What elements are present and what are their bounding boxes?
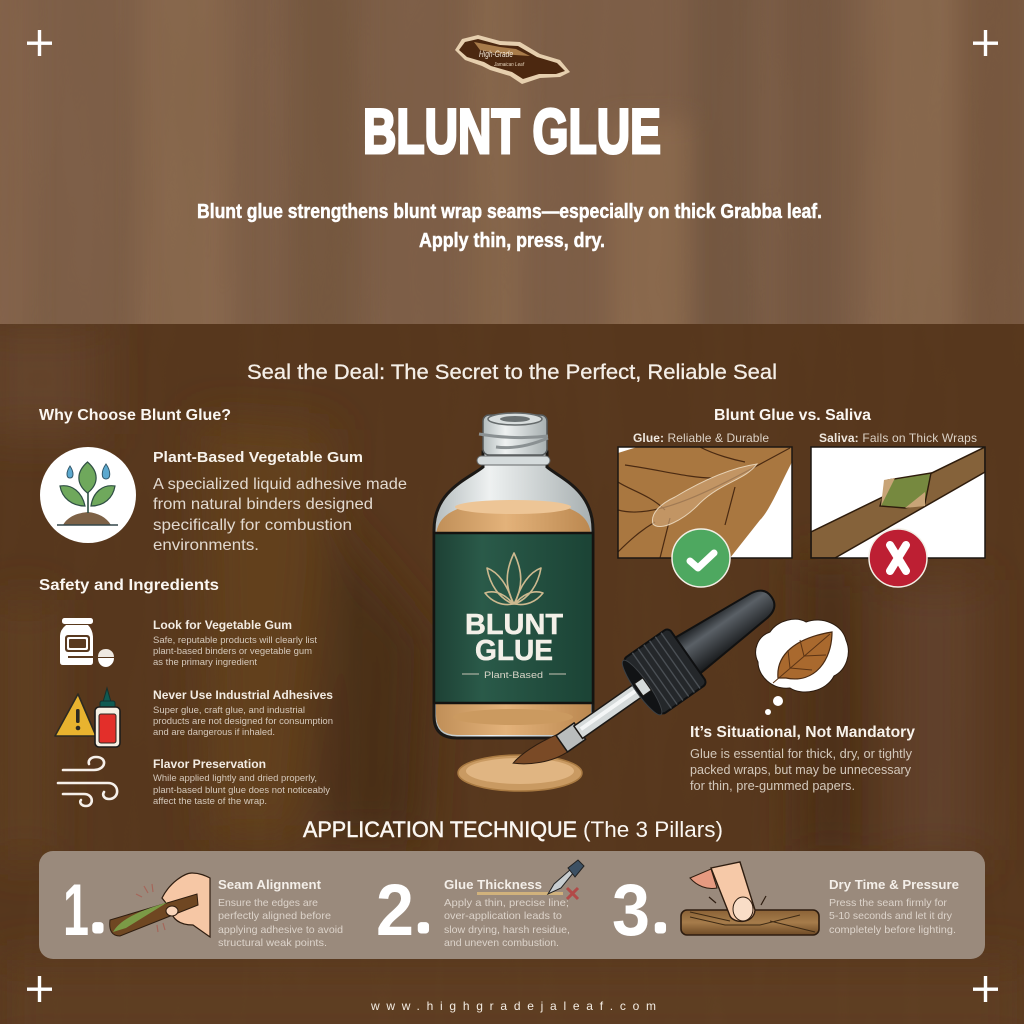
text: industrial adhesives bbox=[153, 705, 333, 738]
text: vegetable gum: Safe, reputable products will clearly list bbox=[153, 635, 317, 646]
step 1: applying adhesive to avoid bbox=[218, 924, 343, 936]
panel: why choose blunt glue: Why Choose Blunt Glue? bbox=[39, 407, 231, 424]
logo: Jamaica leaf map bbox=[455, 35, 570, 84]
liquid bbox=[436, 500, 591, 735]
labels: Saliva: Fails on Thick Wraps bbox=[819, 431, 977, 445]
panel: why choose blunt glue bbox=[39, 407, 407, 554]
subtitle: Blunt glue strengthens blunt wrap seams—especially on thick Grabba leaf. bbox=[197, 201, 822, 223]
description: environments. bbox=[153, 537, 259, 554]
step 2: Apply a thin, precise line; bbox=[444, 897, 569, 909]
text: flavor preservation: plant-based blunt glue does not noticeably bbox=[153, 785, 330, 796]
step 3: 3 bbox=[612, 870, 650, 951]
text: flavor preservation bbox=[153, 773, 330, 807]
logo: Jamaica leaf map: High-Grade bbox=[479, 49, 513, 59]
step 2: Glue Thickness bbox=[444, 878, 542, 892]
text: vegetable gum: plant-based binders or vegetable gum bbox=[153, 646, 312, 657]
subtitle bbox=[197, 201, 822, 252]
panel: safety and ingredients: Look for Vegetable Gum bbox=[153, 618, 292, 632]
icon: wind bbox=[58, 757, 117, 806]
application technique heading bbox=[303, 817, 723, 842]
panel: safety and ingredients: Safety and Ingredients bbox=[39, 577, 219, 594]
labels: Glue: Reliable & Durable bbox=[633, 431, 769, 445]
description: A specialized liquid adhesive made bbox=[153, 476, 407, 493]
icon: jar and scoop bbox=[60, 618, 114, 667]
description: specifically for combustion bbox=[153, 517, 352, 534]
panel: glue vs saliva: Blunt Glue vs. Saliva bbox=[714, 407, 871, 424]
icon: plant in soil bbox=[40, 447, 136, 543]
bottle glass body bbox=[434, 452, 593, 738]
bottle illustration: Plant-Based bbox=[484, 670, 543, 681]
subtitle: Apply thin, press, dry. bbox=[419, 230, 605, 252]
step 1: 1 bbox=[63, 870, 89, 951]
step 1: Ensure the edges are bbox=[218, 897, 318, 909]
text: industrial adhesives: Super glue, craft glue, and industrial bbox=[153, 705, 305, 716]
panel: three pillars bbox=[39, 851, 985, 959]
application technique heading: APPLICATION TECHNIQUE bbox=[303, 817, 577, 842]
panel: safety and ingredients: Never Use Industrial Adhesives bbox=[153, 688, 333, 702]
text: vegetable gum: as the primary ingredient bbox=[153, 657, 257, 668]
step 3: Dry Time & Pressure bbox=[829, 878, 959, 892]
application technique heading: (The 3 Pillars) bbox=[583, 817, 723, 842]
icon: dropper and red x bbox=[548, 860, 584, 899]
title: BLUNT GLUE bbox=[363, 97, 661, 167]
description bbox=[153, 476, 407, 554]
logo: Jamaica leaf map: Jamaican Leaf bbox=[493, 62, 524, 68]
step 2 bbox=[376, 860, 584, 951]
panel: situational note: It’s Situational, Not Mandatory bbox=[690, 724, 915, 741]
step 2: 2 bbox=[376, 870, 414, 951]
image: split blunt bbox=[811, 447, 985, 558]
step 1 bbox=[63, 870, 343, 951]
label text: BLUNT bbox=[465, 609, 563, 641]
footer url: www.highgradejaleaf.com bbox=[370, 999, 656, 1013]
text: flavor preservation: affect the taste of the wrap. bbox=[153, 796, 267, 807]
text: industrial adhesives: and are dangerous if inhaled. bbox=[153, 727, 275, 738]
green label bbox=[434, 533, 593, 703]
icon: finger pressing wrap bbox=[681, 862, 819, 935]
thought bubble with leaf bbox=[756, 619, 848, 715]
panel: situational note: packed wraps, but may be unnecessary bbox=[690, 762, 911, 777]
panel: glue vs saliva bbox=[618, 407, 985, 587]
step 1: Seam Alignment bbox=[218, 878, 322, 892]
panel: safety and ingredients bbox=[39, 577, 333, 807]
step 2: over-application leads to bbox=[444, 910, 562, 922]
text: industrial adhesives: products are not designed for consumption bbox=[153, 716, 333, 727]
icon: warning triangle and glue bottle bbox=[55, 688, 120, 747]
glue puddle bbox=[458, 755, 582, 791]
panel: why choose blunt glue: Plant-Based Vegetable Gum bbox=[153, 449, 363, 466]
labels bbox=[633, 431, 977, 445]
step 1: perfectly aligned before bbox=[218, 910, 331, 922]
background: top leaf band bbox=[0, 0, 1024, 354]
description: from natural binders designed bbox=[153, 496, 373, 513]
panel: situational note bbox=[690, 724, 915, 793]
step 3: 5-10 seconds and let it dry bbox=[829, 910, 953, 922]
panel: safety and ingredients: Flavor Preservation bbox=[153, 757, 266, 771]
icon: hand rolling bbox=[110, 873, 210, 937]
step 3 bbox=[612, 862, 959, 951]
step 2: . bbox=[419, 904, 428, 937]
background: lower dark leaf panel bbox=[0, 336, 966, 851]
label leaf emblem bbox=[485, 553, 543, 605]
bottle illustration: GLUE bbox=[475, 635, 553, 667]
step 3: . bbox=[656, 904, 665, 937]
dropper with brush bbox=[501, 569, 791, 801]
section heading: Seal the Deal: The Secret to the Perfect, Reliable Seal bbox=[247, 361, 777, 384]
bottle neck and cap thread bbox=[483, 415, 547, 455]
text: vegetable gum bbox=[153, 635, 317, 668]
panel: situational note: Glue is essential for thick, dry, or tightly bbox=[690, 746, 912, 761]
step 1: structural weak points. bbox=[218, 937, 327, 949]
icon: check badge bbox=[672, 529, 730, 587]
image: glue on leaf bbox=[618, 447, 792, 558]
panel: situational note: for thin, pre-gummed papers. bbox=[690, 778, 855, 793]
step 1: . bbox=[94, 904, 102, 937]
step 3: completely before lighting. bbox=[829, 924, 956, 936]
icon: X badge bbox=[869, 529, 927, 587]
bottle illustration bbox=[434, 413, 593, 738]
step 3: Press the seam firmly for bbox=[829, 897, 947, 909]
text: flavor preservation: While applied lightly and dried properly, bbox=[153, 773, 317, 784]
step 2: slow drying, harsh residue, bbox=[444, 924, 570, 936]
step 2: and uneven combustion. bbox=[444, 937, 559, 949]
